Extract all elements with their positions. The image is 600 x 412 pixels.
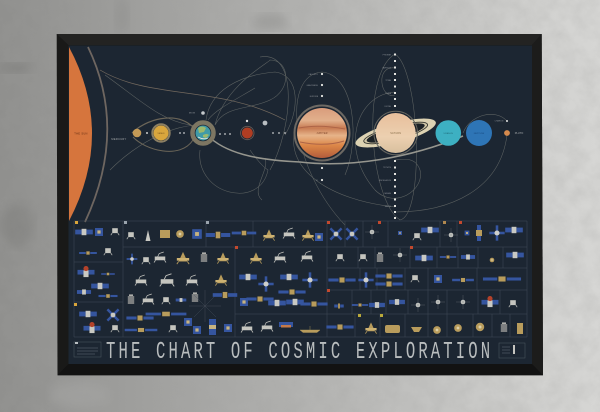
jupiter moons: CALLISTO	[308, 73, 318, 76]
earth moon: MOON	[189, 112, 196, 114]
saturn moons: RHEA	[385, 92, 392, 95]
legend box	[499, 343, 525, 358]
mars	[241, 126, 254, 140]
the sun: THE SUN	[74, 132, 88, 136]
saturn moons: DIONE	[385, 106, 392, 108]
neptune	[466, 120, 492, 146]
saturn moons: MIMAS	[384, 192, 392, 195]
poster	[68, 46, 532, 366]
spacecraft icons: third row	[135, 272, 521, 292]
spacecraft icons: fifth row	[125, 312, 523, 335]
the sun	[69, 47, 92, 221]
spacecraft icons: fourth row	[128, 289, 517, 322]
saturn moons: IAPETUS	[382, 66, 392, 70]
grid lines	[74, 221, 527, 337]
moon dot near mercury	[146, 132, 148, 134]
jupiter: JUPITER	[316, 132, 328, 135]
jupiter	[294, 106, 350, 160]
venus	[152, 124, 170, 142]
saturn moons: TETHYS	[383, 167, 392, 169]
mars moons	[246, 120, 267, 125]
earth	[192, 122, 214, 144]
frame	[57, 34, 543, 375]
mercury	[111, 129, 141, 141]
jupiter moons: EUROPA	[310, 95, 319, 98]
orbit trajectories	[85, 47, 507, 225]
saturn moons: PHOEBE	[383, 54, 392, 56]
section markers	[74, 221, 462, 317]
spacecraft icons: left column	[75, 228, 119, 333]
title: THE CHART OF COSMIC EXPLORATION	[106, 339, 490, 366]
saturn moons	[379, 54, 396, 219]
spacecraft icons: top row	[127, 225, 523, 242]
saturn moons: JANUS	[384, 205, 392, 208]
mercury: MERCURY	[111, 137, 127, 141]
panel: spacecraft grid	[74, 221, 527, 337]
saturn	[353, 111, 438, 155]
credits box	[74, 342, 101, 357]
uranus	[436, 120, 461, 146]
thick flyby path	[207, 135, 463, 164]
panel: solar system	[69, 47, 523, 225]
pluto	[495, 120, 523, 136]
earth moon	[189, 111, 205, 115]
asteroid dots	[179, 132, 286, 135]
pluto: CHARON	[495, 120, 504, 122]
neptune: NEPTUNE	[474, 133, 485, 135]
uranus: URANUS	[444, 132, 453, 135]
saturn moons: ENCELADUS	[379, 179, 392, 182]
saturn moons: TITAN	[385, 79, 392, 82]
saturn: SATURN	[390, 132, 401, 135]
jupiter moons: IO	[316, 180, 318, 182]
jupiter moons	[307, 73, 323, 182]
venus: VENUS	[158, 133, 165, 135]
jupiter moons: GANYMEDE	[307, 84, 319, 87]
pluto: PLUTO	[515, 131, 523, 135]
spacecraft icons: second row	[127, 248, 524, 264]
